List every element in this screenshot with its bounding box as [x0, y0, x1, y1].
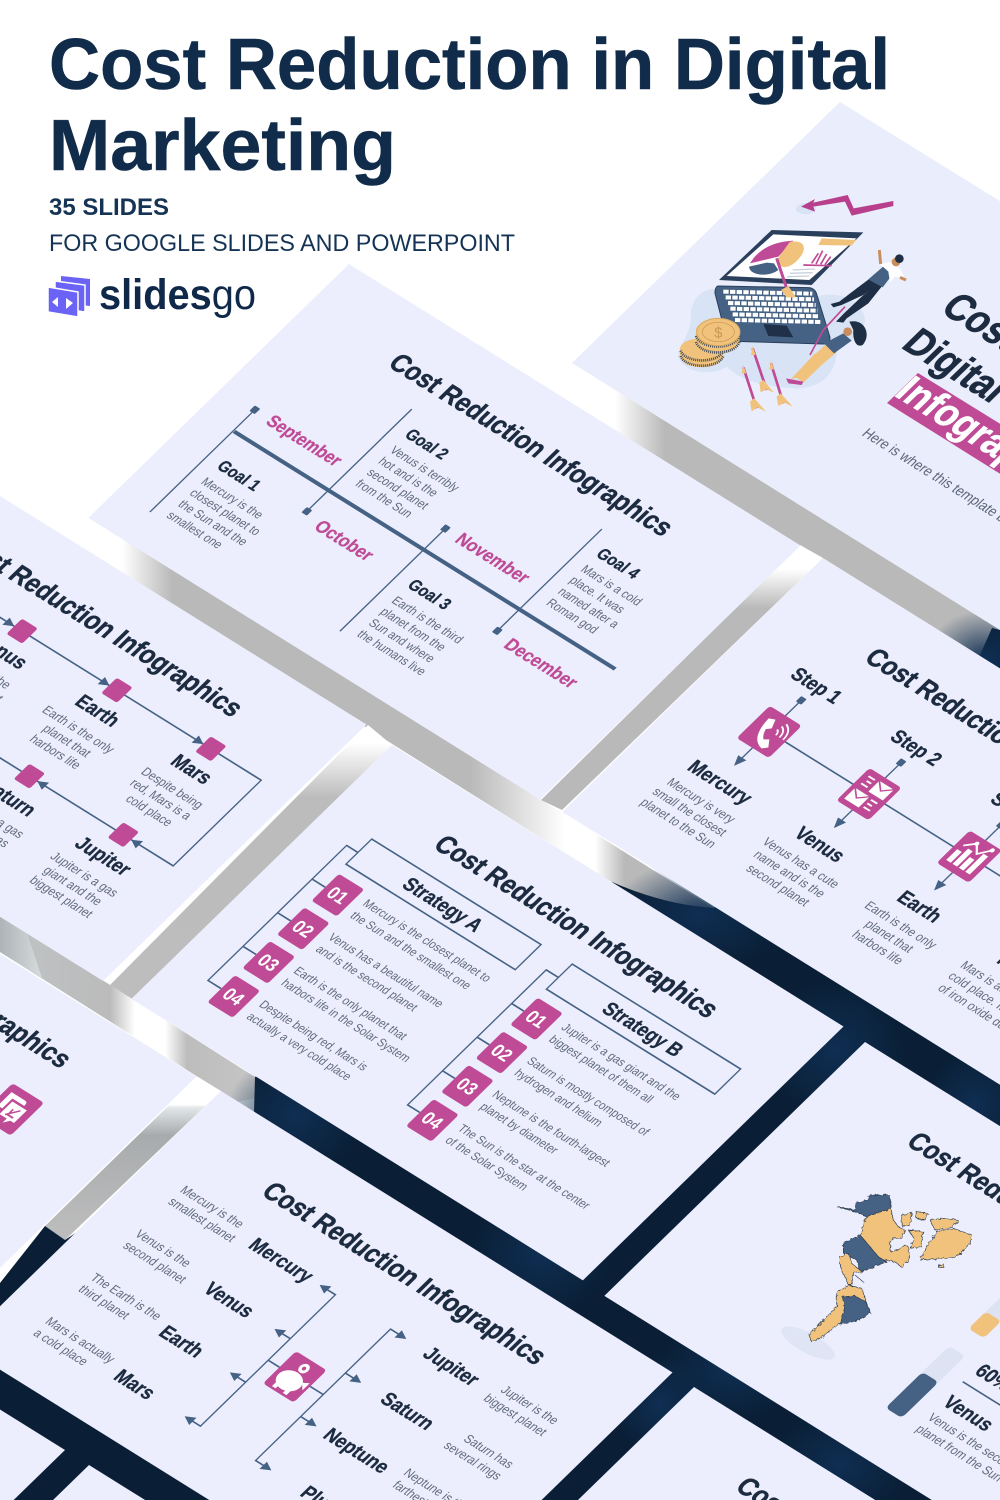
step column: Mercury: Mercury is very	[664, 775, 739, 826]
strategy A item 03: harbors life in the Solar System	[278, 976, 414, 1065]
panel: icon slide	[0, 795, 196, 1330]
right item: Neptune: Neptune	[318, 1424, 395, 1478]
strategy B item 02: hydrogen and helium	[511, 1066, 607, 1129]
goal 3: Goal 3	[403, 576, 455, 613]
step column: Venus: Venus has a cute	[759, 835, 843, 891]
icon: growth chart	[937, 830, 1000, 883]
icon: falling arrow	[796, 195, 893, 216]
strategy A bracket	[208, 845, 360, 989]
goal 1: Mercury is the	[198, 475, 267, 522]
shadow band: below planets and strategy slides	[0, 915, 255, 1113]
step column: Earth: harbors life	[849, 928, 907, 968]
goal 2: second planet	[364, 466, 433, 512]
map: Alaska	[837, 1195, 891, 1217]
panel: planets loop slide	[0, 443, 366, 981]
loop nodes	[0, 619, 227, 847]
goal 1: Goal 1	[213, 457, 265, 495]
strategy A item 01: 01	[322, 882, 354, 908]
goal 3: planet from the	[377, 605, 450, 654]
planet: Mars: cold place	[122, 792, 176, 829]
left item: Venus: Venus is the	[132, 1227, 194, 1270]
goal 2: from the Sun	[352, 477, 416, 520]
strategy B item 04: 04	[416, 1108, 449, 1134]
planet: Earth: harbors life	[26, 732, 84, 772]
goal 2: hot and is the	[375, 454, 442, 500]
left arrowheads	[181, 1281, 331, 1425]
step column: Earth	[838, 877, 962, 974]
subheading: platforms: FOR GOOGLE SLIDES AND POWERPOINT	[49, 230, 515, 257]
step column: Earth: planet that	[862, 917, 917, 956]
illustration: laptop keyboard	[715, 286, 830, 344]
loop arrowheads	[0, 618, 231, 848]
goal 1: smallest one	[163, 508, 226, 552]
right item: Jupiter: biggest planet	[480, 1391, 551, 1439]
icon: piggy bank	[263, 1351, 327, 1403]
divider line	[963, 1382, 1000, 1465]
panel: goals timeline slide	[88, 264, 801, 799]
strategy B item 04: The Sun is the star at the center	[455, 1121, 594, 1212]
strategy A header box	[346, 839, 541, 970]
left item: Earth: The Earth is the	[87, 1271, 165, 1323]
illustration: coin stacks: $	[714, 325, 722, 341]
icon: mail	[836, 768, 902, 820]
strategy A item 04: 04	[218, 984, 250, 1010]
timeline main line	[234, 431, 615, 669]
strategy B item 02: 02	[486, 1040, 518, 1065]
left item: Mars	[30, 1315, 164, 1406]
panel: map slide	[604, 1042, 1000, 1500]
shadow crease: small fold	[238, 1098, 255, 1113]
timeline end markers	[206, 405, 547, 635]
goals slide title: Cost Reduction Infographics	[382, 347, 681, 542]
planet: Venus	[0, 625, 41, 717]
planet: Mars	[115, 743, 229, 834]
goal 4: place. It was	[566, 573, 628, 616]
map: Brazil	[840, 1296, 871, 1325]
strategy B item 04: of the Solar System	[442, 1133, 532, 1193]
panel: piggy bank slide	[0, 1091, 673, 1500]
map: Canada	[860, 1208, 909, 1267]
strategy slide title: Cost Reduction Infographics	[427, 829, 726, 1024]
goal 3: Earth is the third	[388, 594, 467, 646]
dark backdrop: navy background	[0, 628, 1000, 1500]
strategy A column	[194, 832, 541, 1106]
step labels	[785, 664, 1000, 895]
step labels: Step 1	[785, 664, 847, 708]
shadow band: behind cover slide	[349, 264, 1000, 680]
left item: Mars: Mars	[108, 1366, 161, 1404]
right item: Jupiter: Jupiter	[418, 1343, 485, 1391]
step labels: Step 2	[885, 726, 947, 771]
shadow band: between icon and piggy slides	[45, 1077, 221, 1240]
shadow band: below goals slide	[0, 497, 720, 912]
right item: Saturn: Saturn has	[460, 1432, 517, 1471]
step column: Venus: Venus	[789, 823, 850, 867]
left item: Mercury: Mercury is the	[177, 1183, 247, 1231]
strategy B item 03: 03	[451, 1073, 483, 1099]
planet: Earth: Earth	[70, 691, 125, 731]
right item: Jupiter	[416, 1339, 563, 1439]
step stems with arrows	[730, 695, 1000, 955]
map of the Americas	[809, 1195, 972, 1342]
strategy A item 04: actually a very cold place	[243, 1010, 356, 1083]
icon: chat bubbles	[0, 1083, 44, 1136]
step column: Venus	[736, 814, 865, 913]
panel: bottom right slide	[433, 1387, 1000, 1500]
icon: phone	[737, 706, 802, 758]
strategy A label: Strategy A	[397, 874, 488, 936]
goal 2: Venus is terribly	[387, 443, 464, 495]
illustration: pale blob	[678, 289, 865, 388]
step column: Mercury: planet to the Sun	[637, 795, 719, 851]
right item: Neptune	[316, 1421, 473, 1500]
map slide background	[604, 1042, 1000, 1500]
map: USA	[843, 1235, 887, 1272]
strategy A item 02: Venus has a beautiful name	[325, 930, 448, 1011]
left bracket	[191, 1289, 347, 1433]
month: September: September	[262, 411, 347, 470]
illustration: woman	[786, 307, 867, 385]
month: December: December	[499, 635, 583, 692]
strategy A item 01	[311, 874, 497, 999]
strategy B item 01: Jupiter is a gas giant and the	[558, 1020, 685, 1103]
goal 2	[352, 426, 481, 529]
progress bar: yellow value	[968, 1312, 1000, 1338]
goal 1: the Sun and the	[175, 497, 251, 549]
dark backdrop glows	[225, 610, 1000, 1500]
logo: slidesgo mark	[48, 276, 90, 317]
right arrowheads	[260, 1330, 410, 1474]
right item: Jupiter: Jupiter is the	[498, 1383, 562, 1427]
strategy A item 02: 02	[287, 916, 319, 942]
right item: Saturn: Saturn	[375, 1388, 439, 1435]
goal 2: Goal 2	[401, 426, 453, 463]
step column: Mars	[933, 937, 1000, 1037]
strategy B header box	[546, 964, 741, 1094]
logo: slidesgo wordmark: slidesgo	[99, 271, 256, 319]
progress bar: blue value	[886, 1372, 939, 1418]
goal 1: closest planet to	[186, 486, 264, 538]
left item: Mars: Mars is actually	[42, 1315, 119, 1366]
steps connecting line	[769, 732, 1000, 966]
goal 3	[354, 576, 485, 680]
goal 4: Mars is a cold	[578, 562, 646, 608]
main heading	[49, 25, 890, 186]
illustration: laptop, coins, arrows and people	[678, 195, 906, 412]
shadow band: white highlight near steps slide	[790, 545, 880, 600]
month: October: October	[310, 516, 379, 565]
illustration: laptop screen	[719, 230, 863, 285]
map: arctic islands	[902, 1212, 958, 1268]
planet: Jupiter: Jupiter is a gas	[47, 849, 122, 900]
step column: Mercury	[637, 752, 764, 851]
cover slide background	[572, 102, 1000, 630]
goal 4: named after a	[555, 585, 623, 631]
shadow crease: left fold	[0, 917, 42, 978]
left item: Mars: a cold place	[30, 1326, 92, 1368]
strategy B label: Strategy B	[597, 998, 688, 1061]
goal 4: Goal 4	[592, 545, 644, 582]
planet: Mars: Mars	[165, 750, 217, 789]
step column: Earth: Earth is the only	[861, 899, 941, 952]
illustration: darts	[742, 346, 793, 412]
strategy B item 01	[510, 998, 687, 1118]
map: Greenland	[920, 1228, 972, 1260]
illustration: coin stacks	[680, 318, 740, 367]
strategy B item 02: Saturn is mostly composed of	[524, 1054, 653, 1139]
strategy B item 03: Neptune is the fourth-largest	[489, 1088, 614, 1170]
strategy A item 03: 03	[253, 950, 285, 975]
strategy A item 04: Despite being red, Mars is	[256, 997, 372, 1074]
goal 4	[543, 545, 663, 642]
panel: strategy slide	[131, 745, 844, 1280]
left item: Earth	[75, 1271, 212, 1364]
step column: Earth: Earth	[892, 887, 947, 927]
strategy B item 01: biggest planet of them all	[546, 1033, 657, 1106]
planet: Earth: Earth is the only	[39, 703, 118, 757]
step column: Mercury: small the closest	[649, 785, 731, 839]
shadow band: right of goals slide	[541, 545, 823, 810]
strategy B item 04	[406, 1099, 596, 1227]
main heading: Marketing	[49, 106, 396, 186]
progress bar: upper track	[968, 1251, 1000, 1338]
planet: Mars: red, Mars is a	[127, 776, 195, 823]
planet: Jupiter: biggest planet	[26, 873, 97, 921]
left item: Venus: Venus	[198, 1278, 259, 1322]
strategy B bracket	[408, 970, 558, 1112]
illustration: arrow in laptop	[777, 258, 796, 297]
right item: Saturn: several rings	[440, 1439, 505, 1483]
timeline stems	[149, 350, 603, 691]
left item: Earth: third planet	[75, 1282, 133, 1322]
left item: Venus: second planet	[120, 1239, 190, 1286]
strategy B item 02	[475, 1031, 655, 1153]
progress bar: lower track	[886, 1346, 965, 1418]
panel: steps slide	[562, 558, 1000, 1093]
planet: Saturn	[0, 770, 49, 863]
strategy B item 03	[441, 1065, 616, 1184]
goal 1	[163, 457, 294, 561]
panel: corner slide bottom	[0, 1465, 540, 1500]
subheading: slide count: 35 SLIDES	[49, 194, 169, 221]
right item: Saturn	[373, 1385, 517, 1483]
piggy slide title: Cost Reduction Infographics	[256, 1176, 554, 1370]
goal 3: the humans live	[354, 627, 430, 678]
planet: Jupiter: Jupiter	[69, 833, 137, 881]
strategy A item 02	[277, 907, 450, 1025]
strategy A item 01: Mercury is the closest planet to	[359, 897, 495, 985]
planet: Jupiter	[24, 828, 143, 922]
strategy A item 04	[207, 975, 373, 1088]
strategy A item 03	[242, 941, 429, 1067]
strategy A item 02: and is the second planet	[313, 942, 422, 1014]
strategy A item 03: Earth is the only planet that	[290, 964, 411, 1043]
step column: Venus: second planet	[743, 862, 813, 909]
month: November: November	[451, 529, 535, 587]
left item: Venus	[120, 1227, 263, 1324]
map: South America	[809, 1285, 870, 1342]
shadow band: between planets and strategy slides	[110, 725, 392, 999]
step column: Mercury: Mercury	[682, 756, 757, 809]
left item: Mercury: Mercury	[243, 1234, 319, 1287]
loop connector	[0, 559, 261, 866]
planet: Jupiter: giant and the	[40, 863, 106, 908]
strategy B item 03: planet by diameter	[477, 1100, 562, 1157]
left item: Mercury	[165, 1183, 322, 1289]
step column: Venus: name and is the	[750, 848, 829, 901]
panel: cover slide	[572, 102, 1000, 630]
strategy B item 01: 01	[521, 1006, 552, 1032]
planet: Mars: Despite being	[138, 765, 207, 812]
main heading: Cost Reduction in Digital	[49, 25, 890, 105]
heading: Venus: Venus	[938, 1392, 999, 1436]
cover highlight bar	[887, 373, 1000, 480]
left item: Earth: Earth	[154, 1322, 209, 1362]
planet: Earth	[16, 682, 141, 779]
strategy B column	[394, 956, 741, 1231]
strategy A item 01: the Sun and the smallest one	[347, 909, 475, 992]
goal 4: Roman god	[543, 596, 602, 636]
illustration: man	[831, 250, 906, 323]
right bracket	[242, 1321, 400, 1467]
map shadow	[777, 1320, 839, 1366]
left item: Mercury: smallest planet	[165, 1195, 239, 1245]
panel: small corner slide bottom left	[0, 1168, 65, 1500]
map: Caribbean	[855, 1275, 865, 1283]
map: Mexico and Central America	[839, 1253, 862, 1285]
goal 3: Sun and where	[365, 616, 439, 666]
planet: Earth: planet that	[39, 722, 95, 760]
